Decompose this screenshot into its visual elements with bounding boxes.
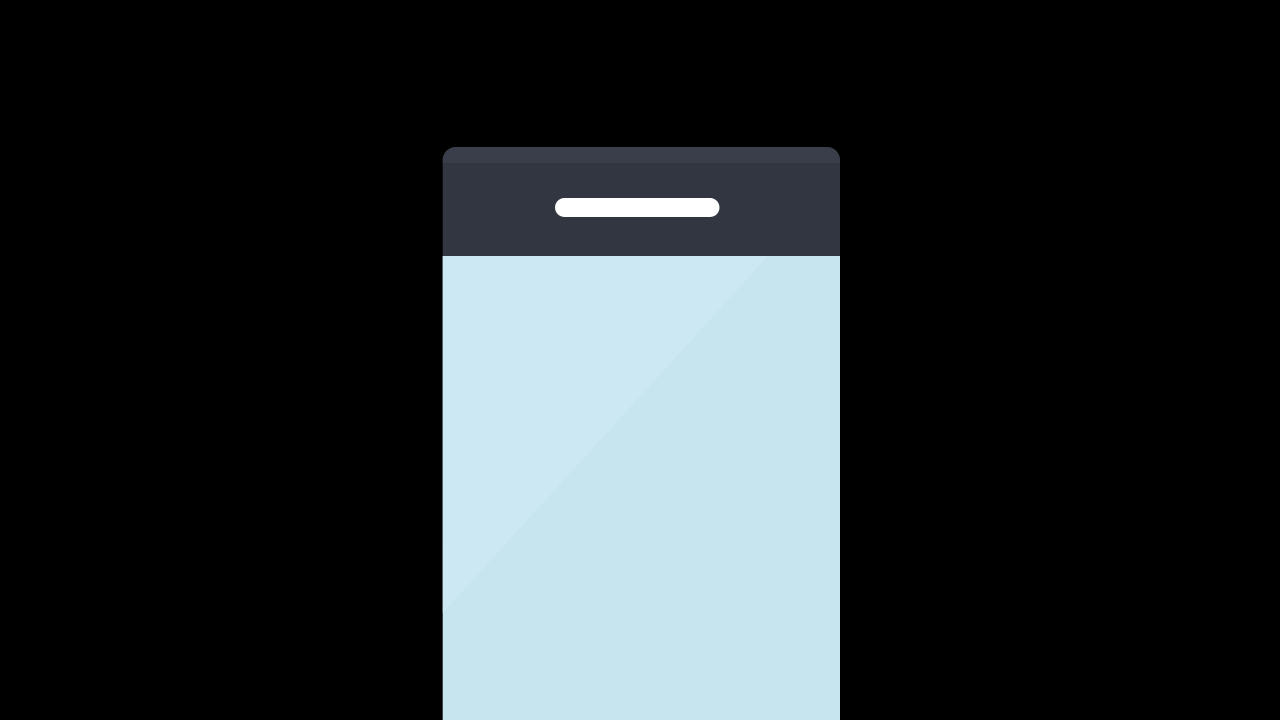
phone device — [443, 147, 840, 720]
header top highlight band — [443, 147, 840, 163]
phone screen — [443, 256, 840, 720]
speaker pill — [555, 198, 720, 217]
screen glare — [443, 256, 768, 613]
phone header body — [443, 147, 840, 256]
